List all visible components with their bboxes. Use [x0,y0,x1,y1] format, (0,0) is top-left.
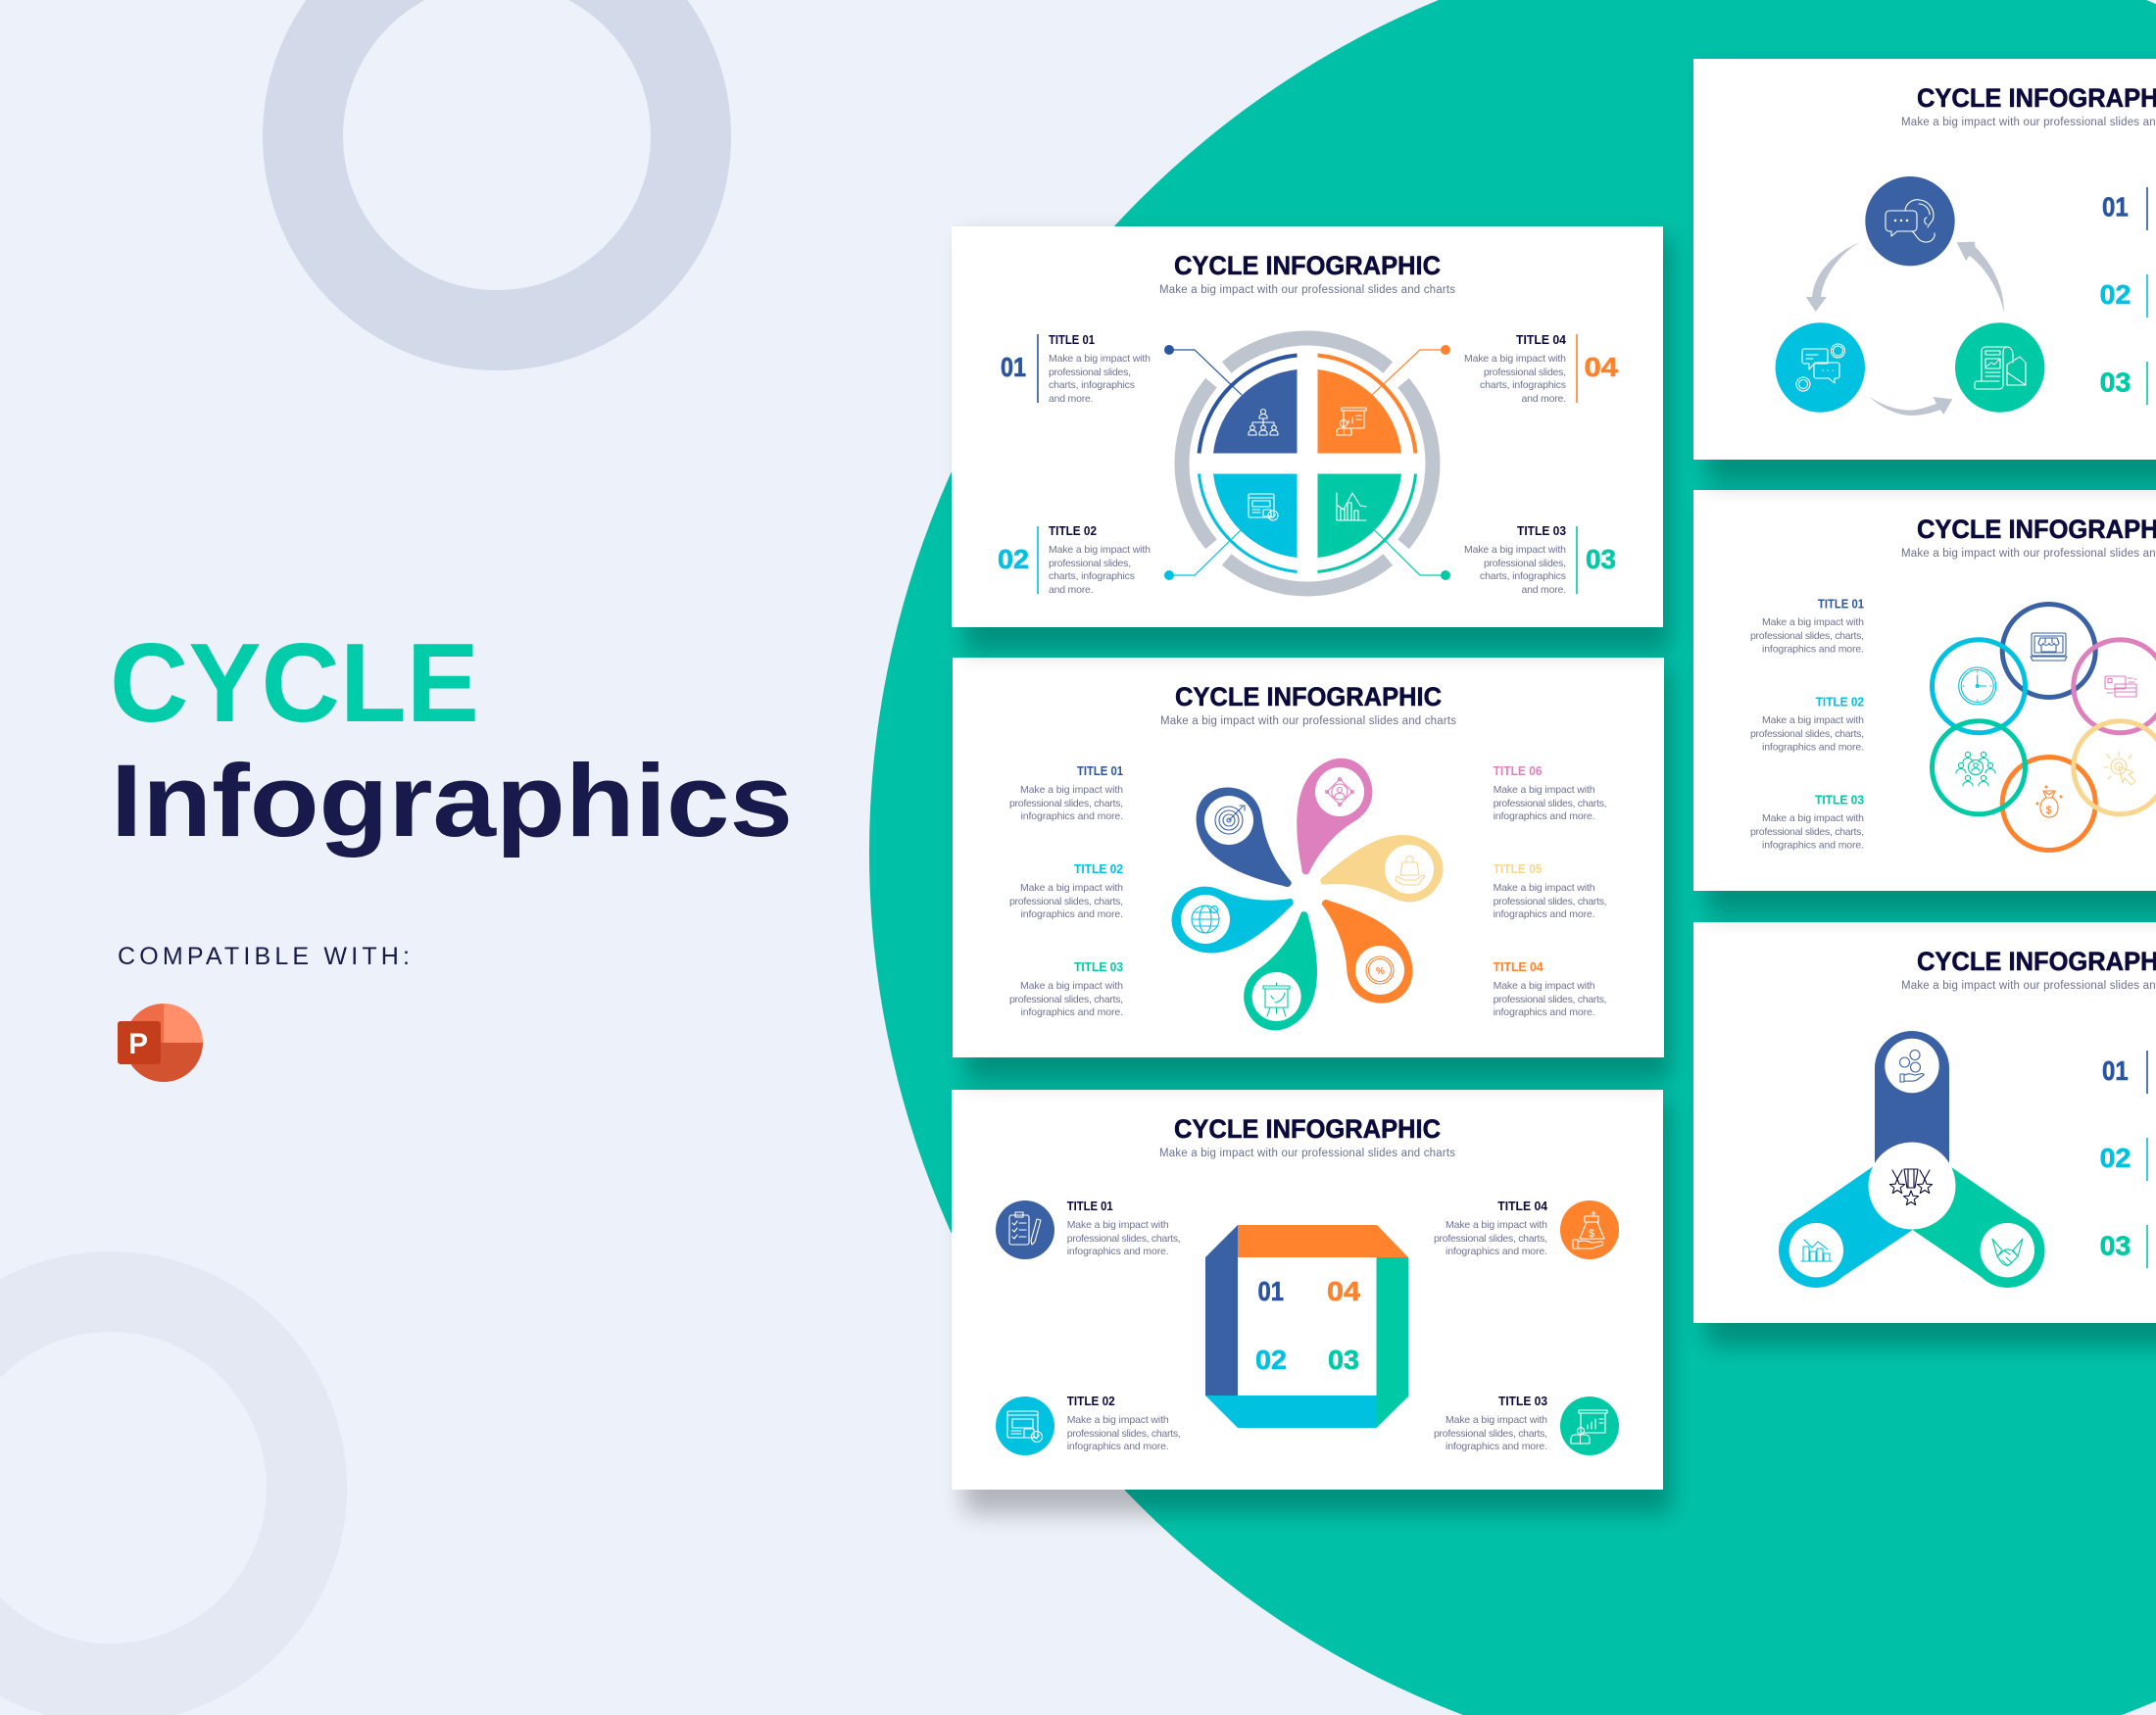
panel: slide with quarter circle cycle [952,226,1663,627]
icon: medals [1889,1169,1933,1205]
text block: title 01: Make a big impact with [1067,1219,1169,1231]
panel: slide with three-step arrows [1693,59,2156,460]
slide title: CYCLE INFOGRAPHIC [1175,682,1442,711]
outer gray ring [1182,338,1433,589]
square cycle diagram [1205,1225,1408,1428]
slide subtitle: Make a big impact with our professional slides and charts [1159,1148,1455,1159]
decorative ring: bottom left [0,1292,307,1684]
text block: title 02: infographics and more. [1021,908,1123,920]
slide title: CYCLE INFOGRAPHIC [1174,251,1441,280]
icon: money flask in hand [1560,1200,1619,1259]
panel: slide with six petals [953,658,1664,1057]
compatible with label: COMPATIBLE WITH: [118,943,410,970]
text block: title 02: infographics and more. [1067,1441,1169,1452]
main title [110,621,793,858]
number 03: 03 [1586,544,1616,574]
number 03: 03 [2100,1230,2131,1260]
text block: title 02: professional slides, charts, [1009,896,1123,907]
text block: title 03 [1434,1394,1547,1452]
number 01: 01 [1001,352,1026,382]
text block: title 03: TITLE 03 [1517,523,1566,538]
number 02: 02 [2100,279,2131,310]
text block: title 04: infographics and more. [1446,1246,1547,1257]
petal: green [1218,910,1348,1041]
text block: title 03: professional slides, charts, [1750,826,1864,838]
text block: title 03: TITLE 03 [1498,1394,1547,1408]
text block: title 01 [1009,763,1123,822]
text block: title 03: professional slides, charts, [1434,1428,1547,1440]
icon: clipboard and pen [996,1200,1054,1259]
quadrant: orange [1317,345,1450,453]
text block: title 04: professional slides, charts, [1494,994,1607,1005]
text block: title 01: TITLE 01 [1077,763,1123,778]
text block: title 03: Make a big impact with [1464,544,1566,556]
icon: money bag: $ [2046,805,2052,816]
text block: title 03 [1464,523,1566,596]
text block: title 03: Make a big impact with [1020,980,1123,992]
text block: title 01: infographics and more. [1021,810,1123,822]
arrow: step 1 to step 2 [1806,242,1860,312]
text block: title 05: professional slides, charts, [1494,896,1607,907]
text block: title 03: and more. [1521,584,1566,596]
text block: title 03: professional slides, [1484,558,1566,569]
number 01: 01 [2102,192,2129,222]
text block: title 02: Make a big impact with [1049,544,1151,556]
text block: title 04 [1464,332,1567,405]
text block: title 04: infographics and more. [1494,1006,1595,1018]
icon: money bag [2036,786,2062,817]
text block: title 03: infographics and more. [1762,840,1864,852]
text block: title 02: TITLE 02 [1049,523,1097,538]
number 04: 04 [1584,352,1618,382]
text block: title 01: charts, infographics [1049,379,1135,391]
panel: slide with three-arm spinner [1693,922,2156,1323]
text block: title 01: and more. [1049,393,1094,405]
text block: title 03: charts, infographics [1480,570,1566,582]
text block: title 03: professional slides, charts, [1009,994,1123,1005]
text block: title 04: Make a big impact with [1446,1219,1547,1231]
panel: slide with square cycle [952,1090,1663,1490]
icon: cursor click [2104,752,2135,785]
quadrant: green [1317,474,1450,580]
text block: title 06: Make a big impact with [1494,784,1595,796]
text block: title 01 [1750,597,1864,656]
icon: PowerPoint logo [118,1004,203,1082]
text block: title 03 [1750,793,1864,852]
icon: people network [1956,752,1995,786]
text block: title 03: TITLE 03 [1815,793,1864,808]
text block: title 06: TITLE 06 [1494,763,1543,778]
text block: title 01: Make a big impact with [1762,616,1864,628]
text block: title 02: professional slides, [1049,558,1131,569]
text block: title 01: professional slides, charts, [1750,630,1864,642]
icon: speech bubble and ear [1886,200,1935,242]
text block: title 01: Make a big impact with [1020,784,1123,796]
text block: title 01: infographics and more. [1762,644,1864,656]
icon: presenter with board [1560,1396,1619,1455]
quadrant: blue [1164,345,1298,453]
circle: step 3 [1955,322,2044,413]
text block: title 02: professional slides, charts, [1750,728,1864,740]
number 02: 02 [2100,1143,2131,1173]
text block: title 03 [1009,959,1123,1018]
text block: title 06 [1494,763,1607,822]
decorative ring: top [303,0,691,330]
text block: title 04: charts, infographics [1480,379,1566,391]
text block: title 02: infographics and more. [1762,742,1864,754]
text block: title 02: TITLE 02 [1067,1394,1115,1408]
square cycle diagram: 03 [1328,1345,1359,1375]
square cycle diagram: 04 [1327,1276,1360,1306]
text block: title 02: Make a big impact with [1762,714,1864,726]
text block: title 02: professional slides, charts, [1067,1428,1181,1440]
text block: title 02 [1009,861,1123,920]
petal: blue [1194,786,1296,887]
petal: yellow [1319,804,1455,941]
text block: title 05: Make a big impact with [1494,882,1595,894]
text block: title 02: Make a big impact with [1020,882,1123,894]
text block: title 01: professional slides, charts, [1009,798,1123,809]
text block: title 02: TITLE 02 [1074,861,1123,876]
text block: title 04: TITLE 04 [1516,332,1567,347]
arrow: step 3 to step 1 [1957,242,2004,313]
text block: title 04: TITLE 04 [1494,959,1544,974]
text block: title 04: TITLE 04 [1497,1199,1548,1213]
icon: handshake [1992,1239,2023,1266]
icon: chat bubbles [1796,344,1844,391]
petal: cyan [1159,847,1295,982]
text block: title 06: professional slides, charts, [1494,798,1607,809]
text block: title 04: and more. [1521,393,1566,405]
icon: credit cards [2105,676,2136,697]
number 02: 02 [998,544,1029,574]
icon: bar chart [1801,1240,1832,1261]
text block: title 02: and more. [1049,584,1094,596]
slide subtitle: Make a big impact with our professional slides and charts [1160,715,1456,727]
text block: title 06: infographics and more. [1494,810,1595,822]
petal: orange: % [1376,966,1385,977]
arrow: step 2 to step 3 [1869,396,1952,416]
text block: title 02: charts, infographics [1049,570,1135,582]
text block: title 05: TITLE 05 [1494,861,1543,876]
square cycle diagram: 02 [1255,1345,1287,1375]
panel: slide with interlinked rings [1693,490,2156,891]
text block: title 05 [1494,861,1607,920]
text block: title 04 [1494,959,1607,1018]
spinner diagram [1779,1031,2044,1288]
petal: pink [1268,750,1394,876]
teal background circle [869,0,2156,1715]
text block: title 03: Make a big impact with [1762,812,1864,824]
circle: step 2 [1776,322,1865,413]
number 03: 03 [2100,367,2131,397]
text block: title 02 [1049,523,1151,596]
icon: laptop storefront [2031,633,2067,661]
circle: step 1 [1865,176,1955,266]
text block: title 04: Make a big impact with [1464,353,1566,365]
petal: orange [1311,900,1419,1006]
text block: title 01: infographics and more. [1067,1246,1169,1257]
icon: coins in hand [1899,1051,1924,1082]
text block: title 04 [1434,1199,1548,1257]
text block: title 03: Make a big impact with [1446,1414,1547,1426]
text block: title 01: professional slides, charts, [1067,1233,1181,1245]
slide subtitle: Make a big impact with our professional slides and charts [1159,284,1455,296]
text block: title 01: TITLE 01 [1067,1199,1113,1213]
icon: money flask in hand: $ [1589,1228,1594,1240]
text block: title 01: Make a big impact with [1049,353,1151,365]
text block: title 02: TITLE 02 [1816,695,1864,710]
interlinked rings diagram [1933,604,2156,851]
text block: title 03: TITLE 03 [1074,959,1123,974]
text block: title 01: TITLE 01 [1818,597,1864,612]
text block: title 02 [1067,1394,1181,1452]
text block: title 03: infographics and more. [1021,1006,1123,1018]
text block: title 03: infographics and more. [1446,1441,1547,1452]
text block: title 02: Make a big impact with [1067,1414,1169,1426]
icon: newspaper and envelope [1975,347,2026,389]
text block: title 01: professional slides, [1049,367,1131,378]
main title: CYCLE [110,621,479,746]
icon: window with badge [996,1396,1054,1455]
square cycle diagram: 01 [1258,1276,1284,1306]
icon: PowerPoint logo: P [128,1028,148,1060]
icon: clock [1959,667,1996,705]
number 01: 01 [2102,1055,2129,1086]
slide title: CYCLE INFOGRAPHIC [1174,1114,1441,1144]
text block: title 01 [1067,1199,1181,1257]
text block: title 01: TITLE 01 [1049,332,1095,347]
text block: title 01 [1049,332,1151,405]
main title: Infographics [111,744,793,858]
text block: title 04: Make a big impact with [1494,980,1595,992]
text block: title 05: infographics and more. [1494,908,1595,920]
text block: title 02 [1750,695,1864,754]
quadrant: cyan [1164,474,1298,580]
text block: title 04: professional slides, charts, [1434,1233,1547,1245]
text block: title 04: professional slides, [1484,367,1566,378]
